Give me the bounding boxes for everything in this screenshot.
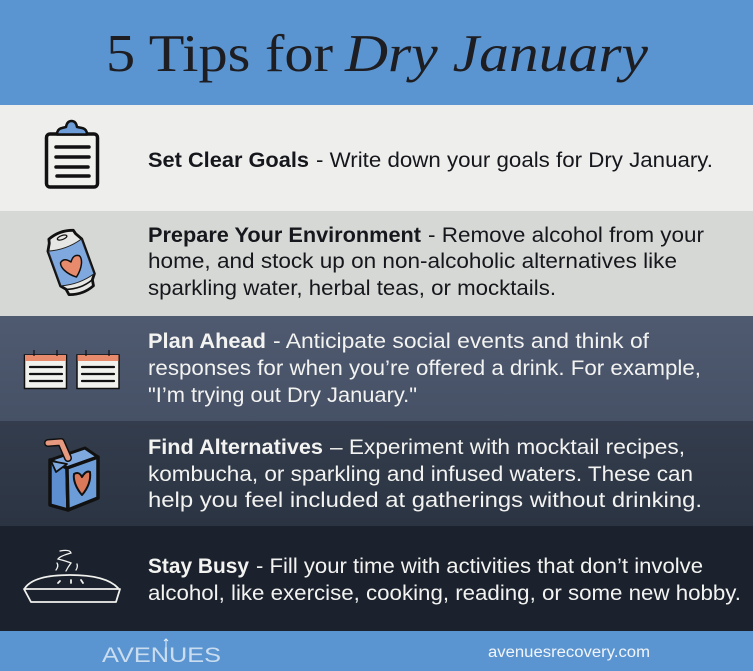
text: prepare your environment: - Remove alcohol from your [428,223,704,247]
text: prepare your environment: sparkling water, herbal teas, or mocktails. [148,276,556,300]
text: plan ahead [148,329,701,407]
text: plan ahead: "I’m trying out Dry January." [148,383,417,407]
panel: stay busy [0,526,753,631]
text: set clear goals: Set Clear Goals [148,148,309,172]
logo: avenues [102,639,221,667]
text: set clear goals: - Write down your goals for Dry January. [316,148,713,172]
text: stay busy: Stay Busy [148,554,249,578]
footer bar [0,631,753,671]
header banner [0,0,753,105]
website url: avenuesrecovery.com [488,644,650,661]
panel: plan ahead [0,316,753,421]
text: find alternatives: – Experiment with mocktail recipes, [330,435,685,459]
text: stay busy: alcohol, like exercise, cooking, reading, or some new hobby. [148,581,741,605]
icon: juice box with straw [48,442,98,510]
title: Dry January [344,25,649,83]
text: find alternatives: help you feel included at gatherings without drinking. [148,488,702,512]
text: set clear goals [148,148,713,172]
title [106,25,649,83]
text: stay busy [148,554,741,605]
icon: two calendars [24,350,119,388]
text: plan ahead: Plan Ahead [148,329,266,353]
icon: clipboard [46,121,98,187]
panel: set clear goals [0,105,753,211]
text: plan ahead: responses for when you’re offered a drink. For example, [148,356,701,380]
text: find alternatives: kombucha, or sparkling and infused waters. These can [148,462,693,486]
title: 5 Tips for [106,25,333,83]
text: find alternatives: Find Alternatives [148,435,323,459]
icon: soda can with heart [43,226,99,299]
panel: prepare your environment [0,211,753,316]
text: prepare your environment: Prepare Your Environment [148,223,421,247]
text: plan ahead: - Anticipate social events and think of [273,329,649,353]
panel: find alternatives [0,421,753,526]
text: find alternatives [148,435,702,512]
text: stay busy: - Fill your time with activities that don’t involve [256,554,703,578]
icon: steaming pie [24,550,120,602]
text: prepare your environment [148,223,704,300]
text: prepare your environment: home, and stock up on non-alcoholic alternatives like [148,249,677,273]
logo: avenues: AVENUES [102,644,221,667]
